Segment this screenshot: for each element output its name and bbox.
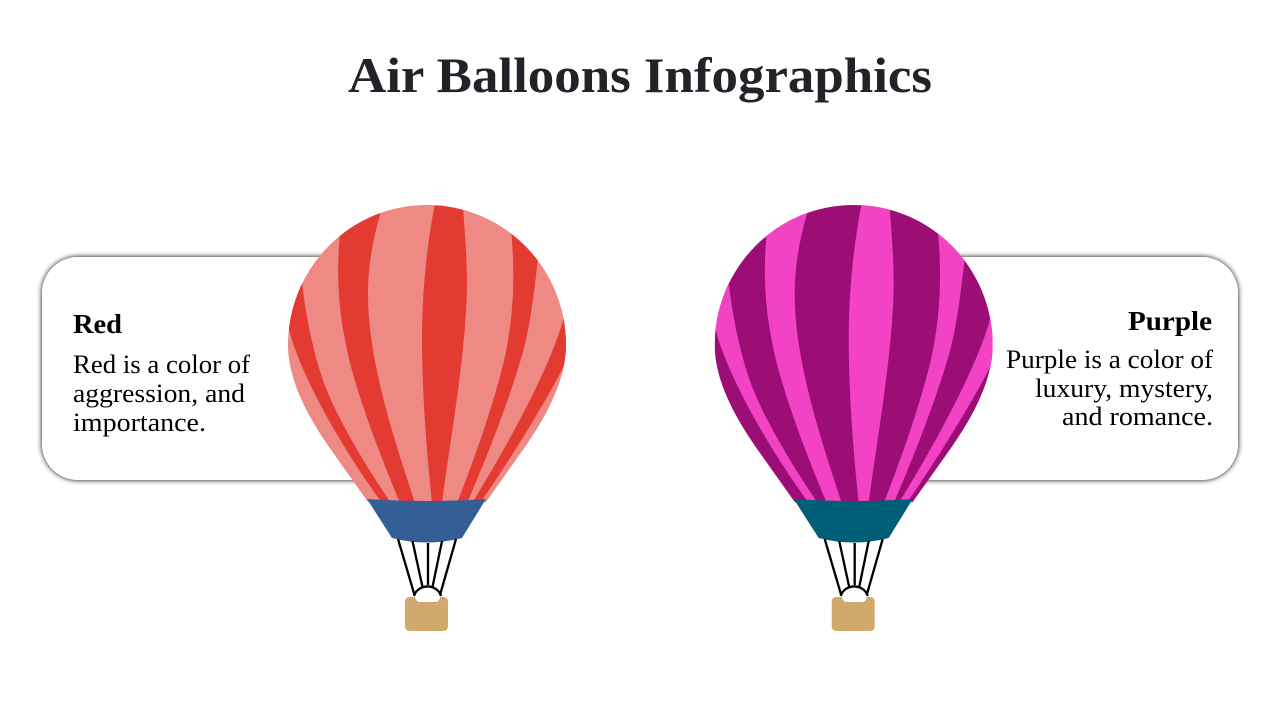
icon: purple balloon — [712, 200, 997, 631]
text block: red description — [73, 350, 250, 437]
balloon skirt: blue — [367, 499, 486, 542]
balloon envelope: red — [285, 200, 570, 505]
balloon ropes — [825, 539, 883, 596]
text block: purple description: luxury, mystery, — [1035, 374, 1213, 403]
text block: red description: aggression, and — [73, 379, 245, 408]
panel: purple — [878, 257, 1238, 480]
panel: red — [42, 257, 402, 480]
card background: purple — [878, 257, 1238, 480]
text block: red description: Red is a color of — [73, 350, 250, 379]
balloon ropes — [398, 539, 456, 596]
heading: purple: Purple — [1128, 306, 1212, 336]
balloon basket — [405, 597, 448, 631]
balloon skirt: teal — [794, 499, 913, 542]
title: Air Balloons Infographics — [348, 47, 932, 103]
text block: purple description: Purple is a color of — [1006, 345, 1213, 374]
text block: purple description — [1006, 345, 1213, 431]
text block: purple description: and romance. — [1062, 402, 1213, 431]
icon: red balloon — [285, 200, 570, 631]
balloon envelope: purple — [712, 200, 997, 505]
card background: red — [42, 257, 402, 480]
balloon basket — [832, 597, 875, 631]
heading: red: Red — [73, 309, 122, 339]
text block: red description: importance. — [73, 408, 206, 437]
